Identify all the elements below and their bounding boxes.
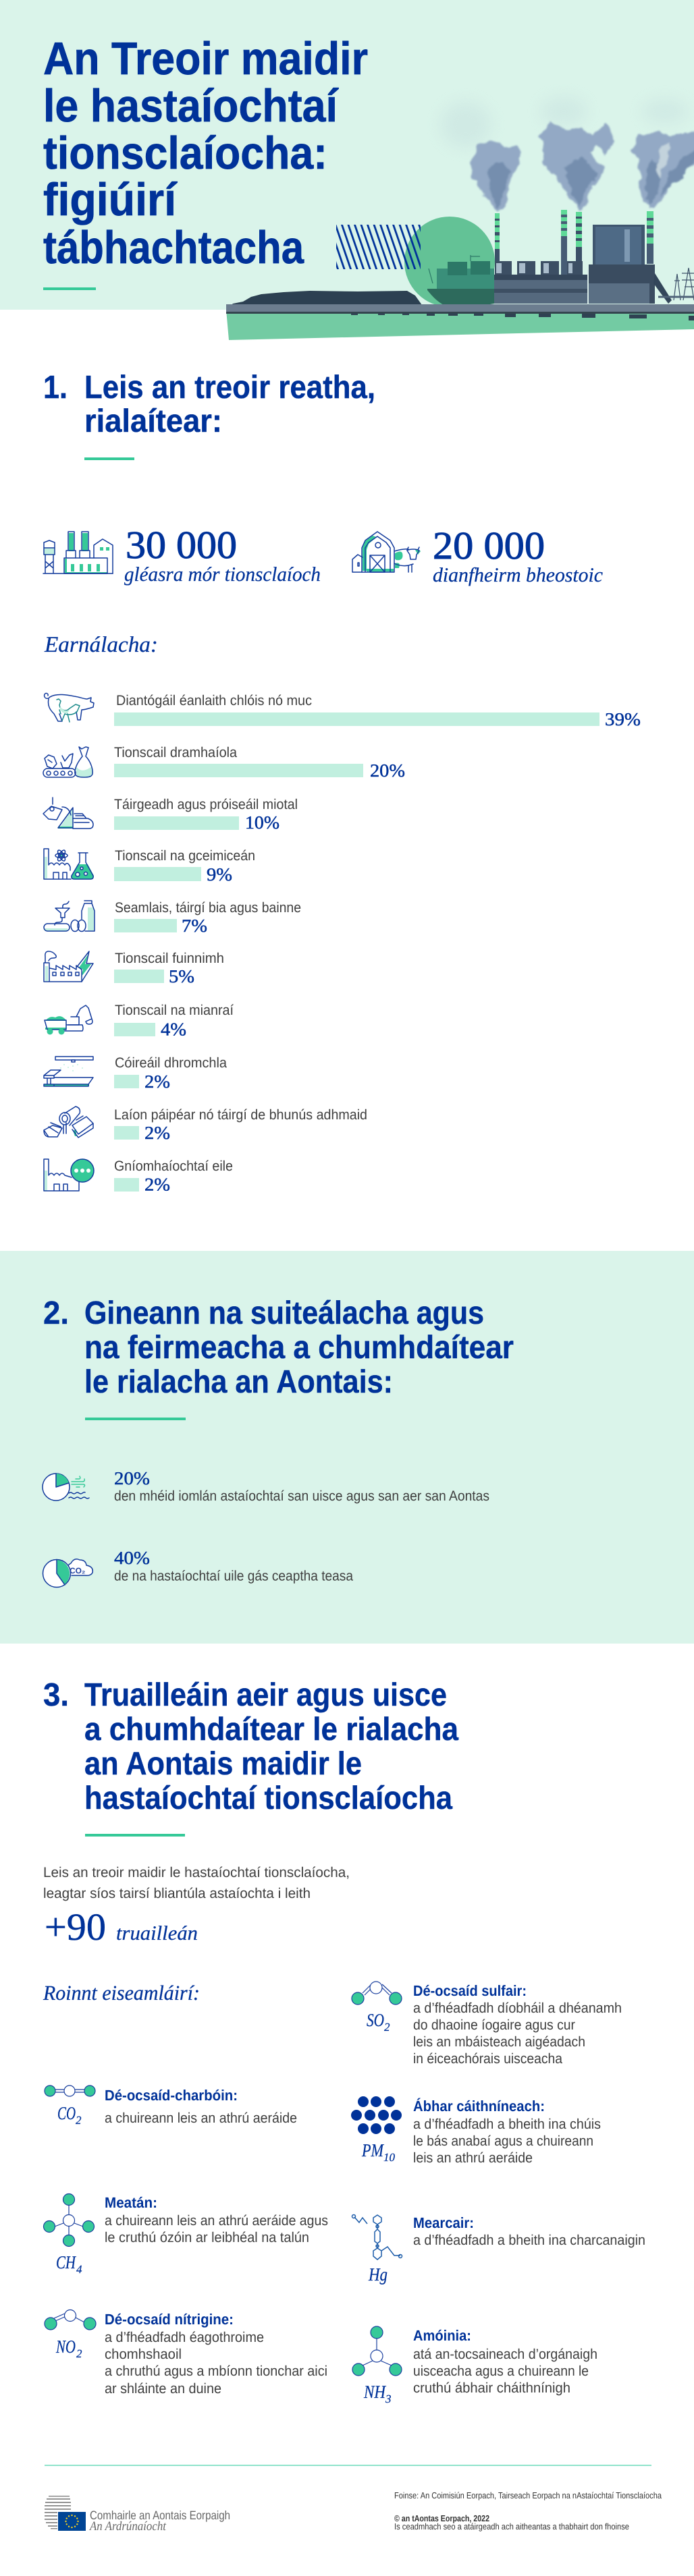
intro text: leagtar síos tairsí bliantúla astaíochta i leith [43,1886,311,1901]
section 3 heading: a chumhdaítear le rialacha [84,1712,458,1747]
bar [114,712,599,726]
hatch block [336,225,421,269]
value: 20% [370,760,405,781]
pollutant: CO2 [45,2085,297,2127]
description: Dé-ocsaíd nítrigine: [105,2311,234,2328]
bar [114,919,177,932]
icon: factory with dots [44,1159,94,1191]
row: poultry and pigs [45,693,641,729]
icon: paper roll and logs [44,1107,93,1138]
section 1 heading [43,370,375,439]
icon: Hg molecule [352,2214,402,2260]
pollutant: NO2 [45,2310,327,2397]
value: 4% [161,1019,186,1040]
description: le cruthú ózóin ar leibhéal na talún [105,2230,309,2245]
row: food [44,900,301,936]
title: tábhachtacha [43,222,304,273]
logo text: An Ardrúnaíocht [88,2519,167,2533]
bar [114,867,201,881]
description [413,2327,597,2396]
description [413,2214,645,2248]
label: Gníomhaíochtaí eile [114,1158,233,1174]
title [43,33,368,273]
bar chart: sectors [43,693,641,1195]
value: 2% [144,1123,170,1143]
description: ar shláinte an duine [105,2381,221,2397]
label: Diantógáil éanlaith chlóis nó muc [116,693,312,708]
description: a chuireann leis an athrú aeráide [105,2110,297,2126]
tree line [226,291,432,314]
description: uisceacha agus a chuireann le [413,2363,589,2379]
stat: +90 pollutants: truailleán [116,1922,198,1944]
section 3 heading: 3. [43,1677,69,1713]
label: Tionscail na mianraí [115,1003,234,1018]
description: a chuireann leis an athrú aeráide agus [105,2213,328,2229]
icon: barn and cow [352,532,421,572]
icon: surface treatment [44,1057,93,1086]
label: Laíon páipéar nó táirgí de bhunús adhmaid [114,1107,367,1123]
number: 30 000 [126,523,237,567]
section 1 heading: 1. [43,370,68,405]
bar [114,1178,139,1192]
row: energy [44,951,224,986]
description: de na hastaíochtaí uile gás ceaptha teasa [114,1568,353,1584]
section 2 heading: na feirmeacha a chumhdaítear [84,1330,514,1366]
section 3 accent rule [85,1834,185,1837]
description: atá an-tocsaineach d’orgánaigh [413,2347,597,2362]
pollutant: NH3 [352,2326,597,2405]
stat: +90 pollutants [45,1906,198,1949]
icon: pie with CO2 cloud: CO₂ [70,1566,85,1575]
description: den mhéid iomlán astaíochtaí san uisce agus san aer san Aontas [114,1488,489,1504]
icon: energy factory with bolt [44,951,93,982]
description: le bás anabaí agus a chuireann [413,2133,593,2149]
value: 10% [245,812,279,833]
description: leis an mbáisteach aigéadach [413,2034,585,2050]
formula: 2 [76,2347,82,2360]
formula: 4 [76,2263,82,2276]
icon: waste conveyor and bag [43,747,92,777]
description: Dé-ocsaíd sulfair: [413,1982,527,1999]
formula [361,2140,396,2164]
section 2 heading: le rialacha an Aontais: [84,1364,393,1400]
green ground [226,307,694,340]
section 2 heading: Gineann na suiteálacha agus [84,1295,484,1331]
label: Cóireáil dhromchla [115,1055,227,1071]
formula: 10 [383,2151,396,2164]
icon: CH4 molecule [43,2194,95,2247]
label: Seamlais, táirgí bia agus bainne [115,900,301,916]
description: leis an athrú aeráide [413,2150,533,2166]
description: Amóinia: [413,2327,471,2344]
formula: NO [55,2336,76,2357]
sectors subheading: Earnálacha: [44,633,158,657]
value: 2% [144,1071,170,1092]
chimneys [495,210,653,275]
section 1 heading: Leis an treoir reatha, [84,370,375,405]
pollutant: SO2 [352,1982,622,2067]
piers [351,313,694,320]
section 2 heading [43,1295,514,1400]
logo text [88,2509,230,2533]
EU flag [58,2512,86,2531]
section 3 heading: an Aontais maidir le [84,1746,362,1782]
description [413,2098,601,2166]
value: 20% [114,1468,150,1488]
section 1 heading: rialaítear: [84,403,222,439]
section 2 band [0,1251,694,1644]
description: a d’fhéadfadh éagothroime [105,2330,264,2345]
smoke plumes [471,121,694,213]
intro text [43,1865,350,1901]
stat: 20% [43,1468,489,1504]
section 2 heading: 2. [43,1295,69,1331]
factory illustration [226,96,694,340]
pollutant: CH4 [43,2194,328,2276]
value: 2% [144,1175,170,1195]
row: paper and wood [44,1107,367,1143]
icon: particles [351,2096,402,2134]
formula: NH [363,2382,386,2402]
formula: 3 [385,2392,392,2405]
section 3 heading [43,1677,458,1816]
bar [114,764,363,777]
description: cruthú ábhair cháithnínigh [413,2380,570,2396]
value: 39% [605,709,641,729]
row: metals [43,797,298,833]
row: chemicals [44,848,255,885]
icon: NH3 molecule [352,2326,402,2376]
pollutant: PM10 [351,2096,601,2166]
title: le hastaíochtaí [43,80,339,132]
label: Tionscail dramhaíola [114,745,237,760]
pylons [658,268,694,300]
formula: CO [57,2103,76,2123]
stat: 20 000 [352,524,603,586]
bar [114,1023,155,1036]
smoke haze [440,96,689,148]
icon: factory [43,532,113,573]
title: figiúirí [43,174,178,225]
icon: pig and rooster [45,694,94,722]
row: surface treatment [44,1055,227,1092]
description [105,2194,328,2245]
icon: SO2 molecule [352,1982,402,2005]
label: Tionscail na gceimiceán [115,848,255,864]
power plant buildings [494,225,672,312]
pier rail [226,304,694,313]
pollutant: Hg [352,2214,645,2285]
bar [114,970,164,983]
footer rule [45,2465,651,2466]
description [105,2311,327,2397]
description: Mearcair: [413,2214,474,2231]
description: Dé-ocsaíd-charbóin: [105,2087,238,2104]
description: a d’fhéadfadh a bheith ina charcanaigin [413,2233,645,2248]
number: 20 000 [433,524,545,567]
formula: PM [361,2140,384,2160]
logo: Council of the EU [45,2496,230,2533]
icon: pie with air and water [43,1474,89,1501]
description: chomhshaoil [105,2347,182,2362]
logo text: Comhairle an Aontais Eorpaigh [90,2509,230,2522]
bar [114,1075,139,1088]
icon: metal processing [43,797,93,829]
value: 7% [182,916,207,936]
source and copyright: Is ceadmhach seo a atáirgeadh ach aitheantas a thabhairt don fhoinse [394,2521,629,2531]
section 3 heading: Truailleáin aeir agus uisce [84,1677,447,1713]
value: 9% [207,864,232,885]
description: a chruthú agus a mbíonn tionchar aici [105,2363,327,2379]
label: Tionscail fuinnimh [115,951,224,966]
icon: CO2 molecule [45,2085,95,2096]
intro text: Leis an treoir maidir le hastaíochtaí tionsclaíocha, [43,1865,350,1880]
bar [114,816,239,830]
description [105,2087,297,2126]
logo stripes [45,2496,71,2529]
label: dianfheirm bheostoic [433,564,603,586]
title accent rule [43,287,96,290]
row: other [44,1158,233,1195]
icon: NO2 molecule [45,2310,96,2330]
buildings inside circle [427,255,494,307]
formula: SO [367,2010,384,2030]
source and copyright [394,2490,662,2531]
section 1 accent rule [84,457,134,460]
source and copyright: © an tAontas Eorpach, 2022 [394,2513,489,2523]
description: a d’fhéadfadh díobháil a dhéanamh [413,2000,622,2016]
header band [0,0,694,310]
description: Meatán: [105,2194,157,2211]
value: 5% [169,966,194,986]
icon: food and dairy [44,901,95,931]
formula: 2 [76,2114,82,2127]
title: tionsclaíocha: [43,128,327,179]
description: in éiceachórais uisceacha [413,2051,562,2067]
description: do dhaoine íogaire agus cur [413,2017,575,2033]
title: An Treoir maidir [43,33,368,84]
section 2 accent rule [85,1418,186,1420]
formula: 2 [384,2021,390,2034]
stat: 40% [43,1548,353,1587]
bar [114,1126,139,1140]
examples subheading: Roinnt eiseamláirí: [43,1981,200,2005]
formula: CH [56,2252,76,2272]
section 3 heading: hastaíochtaí tionsclaíocha [84,1781,452,1816]
description: Ábhar cáithníneach: [413,2098,545,2115]
stat: 30 000 [43,523,321,586]
stat: +90 pollutants: +90 [45,1906,106,1949]
icon: chemistry flask and factory [44,849,94,879]
label: gléasra mór tionsclaíoch [124,563,321,586]
description [413,1982,622,2067]
icon: excavator and cart [45,1005,92,1035]
label: Táirgeadh agus próiseáil miotal [114,797,298,812]
icon: pie with CO2 cloud [43,1559,92,1587]
green circle [404,217,495,307]
value: 40% [114,1548,150,1568]
formula: Hg [368,2264,388,2285]
row: waste [43,745,405,781]
description: a d’fhéadfadh a bheith ina chúis [413,2117,601,2132]
row: minerals [45,1003,234,1040]
